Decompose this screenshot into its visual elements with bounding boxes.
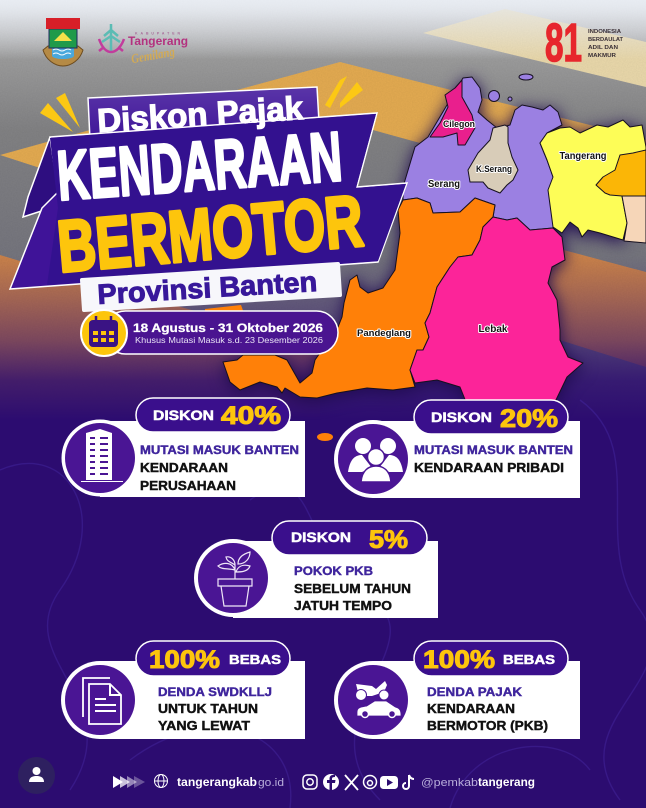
logo: Tangerang Gemilang: KABUPATEN [135,32,180,36]
badge: diskon 40% [136,398,290,432]
card text [294,564,411,613]
website url: tangerangkab [177,777,257,789]
card text: UNTUK TAHUN [158,702,258,716]
logo: Tangerang Gemilang: Tangerang [128,34,188,48]
card text: YANG LEWAT [158,719,250,733]
card: diskon 40% [62,398,305,497]
islands [205,74,533,441]
card text: MUTASI MASUK BANTEN [140,443,299,457]
social handle: @pemkab [421,777,478,789]
icon: facebook [323,774,339,790]
social handle [421,777,535,789]
banner: main ribbon [10,113,407,289]
map labels: Serang [428,179,460,190]
logo: HUT RI 81: BERDAULAT [588,37,623,43]
footer: social media [303,774,535,790]
social handle: tangerang [478,777,535,789]
icon: calendar [81,310,127,356]
card text: PERUSAHAAN [140,479,236,493]
heading: Provinsi Banten: Provinsi Banten [97,266,318,310]
badge: diskon 40%: DISKON [153,408,214,423]
badge: 100% bebas: 100% [149,646,220,674]
card text: DENDA PAJAK [427,685,522,699]
card: diskon 20% [334,400,580,498]
note text: Khusus Mutasi Masuk s.d. 23 Desember 2026 [135,335,323,345]
card text: SEBELUM TAHUN [294,582,411,596]
card: bebas denda pajak [334,641,580,739]
logo: HUT RI 81: ADIL DAN [588,45,618,51]
region: Kota Tangerang [596,150,646,196]
icon: office building [81,429,123,482]
card text [427,685,548,733]
icon: youtube [380,776,398,789]
badge: 100% bebas: BEBAS [229,652,281,667]
card text [414,443,573,475]
icon: globe [154,774,168,788]
map labels [357,119,606,339]
region: Kota Serang [468,125,518,193]
logo: HUT RI 81: 81 [545,13,582,73]
region: Tangerang [540,120,646,240]
icon: tiktok [403,775,414,789]
badge: diskon 5% [272,521,427,555]
card text: KENDARAAN PRIBADI [414,461,564,475]
decorative rays [40,76,363,132]
logo: HUT RI 81: INDONESIA [588,29,622,35]
logo: HUT RI 81: MAKMUR [588,53,617,59]
heading: Kendaraan: KENDARAAN [55,117,344,215]
badge: 100% bebas: BEBAS [503,652,555,667]
icon: potted plant [218,552,252,606]
badge: diskon 20% [414,400,568,434]
card text: POKOK PKB [294,564,373,578]
card text: BERMOTOR (PKB) [427,719,548,733]
icon: documents [83,678,121,724]
region: Cilegon [430,80,475,145]
badge: diskon 20%: DISKON [431,410,492,425]
footer: website [113,774,284,789]
region: Serang [403,77,562,230]
card text: JATUH TEMPO [294,599,392,613]
badge: diskon 5%: DISKON [291,530,351,545]
region: Pandeglang [223,198,495,398]
region: Lebak [410,217,583,402]
map labels: Lebak [478,324,508,335]
heading: Diskon Pajak: Diskon Pajak [96,89,305,139]
date text: 18 Agustus - 31 Oktober 2026 [133,323,323,335]
badge: diskon 5%: 5% [369,526,408,554]
map labels: Pandeglang [357,328,411,339]
card text: MUTASI MASUK BANTEN [414,443,573,457]
icon: arrows [113,776,145,788]
icon: instagram [303,775,317,789]
map of Banten [205,74,646,441]
badge: 100% bebas [414,641,568,676]
icon: people [348,438,403,482]
panel: Provinsi Banten [82,264,340,310]
heading: Bermotor: BERMOTOR [54,181,366,288]
banner: Diskon Pajak [88,87,319,140]
badge: 100% bebas: 100% [423,646,495,674]
card text [158,685,272,733]
icon: motorcycle and car [356,681,400,718]
logo: Tangerang Gemilang: Gemilang [130,44,176,66]
card: diskon 5% [194,521,438,618]
map labels: K.Serang [476,164,512,175]
map labels: Tangerang [560,150,606,162]
avatar button [18,757,55,794]
map labels: Cilegon [443,119,475,130]
icon: threads [364,776,376,788]
logo: Kabupaten Tangerang shield [43,18,83,66]
card: bebas denda SWDKLLJ [61,641,305,739]
title banner [10,87,407,310]
region: Kota Tangerang Selatan [622,196,646,243]
card text [140,443,299,493]
card text: KENDARAAN [427,702,515,716]
badge: 100% bebas [136,641,290,676]
card text: DENDA SWDKLLJ [158,685,272,699]
date pill [81,310,338,356]
badge: diskon 40%: 40% [221,402,281,430]
icon: X [345,775,358,790]
footer: website: go.id [258,777,284,789]
badge: diskon 20%: 20% [500,405,558,433]
logo: Tangerang Gemilang [99,24,188,66]
card text: KENDARAAN [140,461,228,475]
